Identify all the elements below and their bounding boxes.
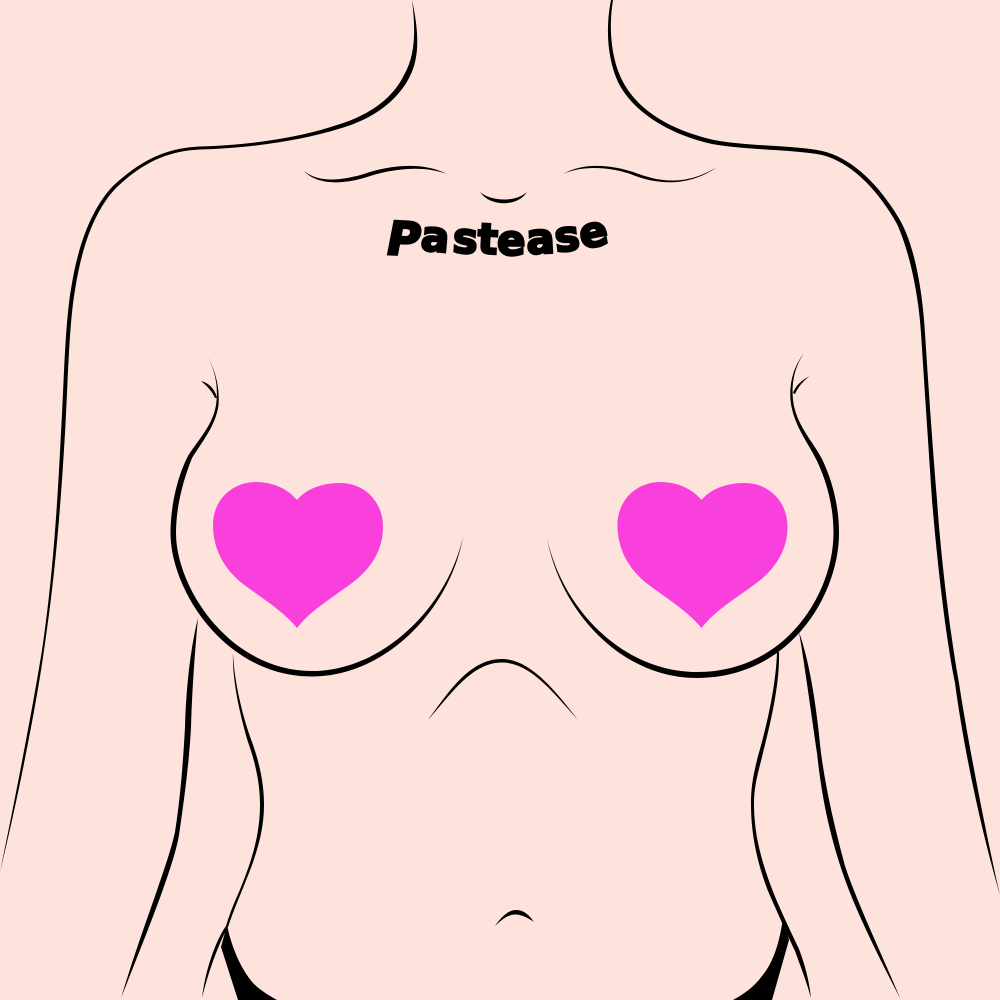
left neck and shoulder line: [0, 0, 417, 872]
right inner arm: [799, 632, 900, 998]
lower right wedge: [733, 918, 789, 1000]
logo: Pastease: s: [552, 211, 582, 262]
right neck and shoulder line: [608, 0, 1000, 895]
right waist: [751, 652, 811, 998]
right underarm fold: [793, 376, 810, 394]
left breast contour: [170, 353, 463, 676]
logo: Pastease: a: [525, 214, 556, 264]
logo: Pastease: [382, 205, 612, 267]
left collarbone: [304, 166, 447, 182]
lower left wedge: [221, 925, 277, 1000]
logo: Pastease: e: [575, 205, 612, 259]
right collarbone: [563, 166, 717, 182]
left waist: [202, 653, 264, 998]
sternum notch: [480, 192, 527, 203]
logo: Pastease: e: [497, 216, 526, 265]
left underarm fold: [201, 381, 217, 398]
right breast contour: [547, 353, 839, 678]
logo: Pastease: s: [451, 213, 480, 264]
left heart pastie: [213, 482, 383, 628]
navel: [495, 910, 534, 926]
logo: Pastease: a: [419, 211, 452, 262]
right heart pastie: [618, 482, 788, 628]
logo: Pastease: P: [382, 212, 426, 267]
logo: Pastease: t: [476, 214, 499, 264]
left inner arm: [121, 618, 198, 998]
sternum arc: [428, 659, 578, 720]
